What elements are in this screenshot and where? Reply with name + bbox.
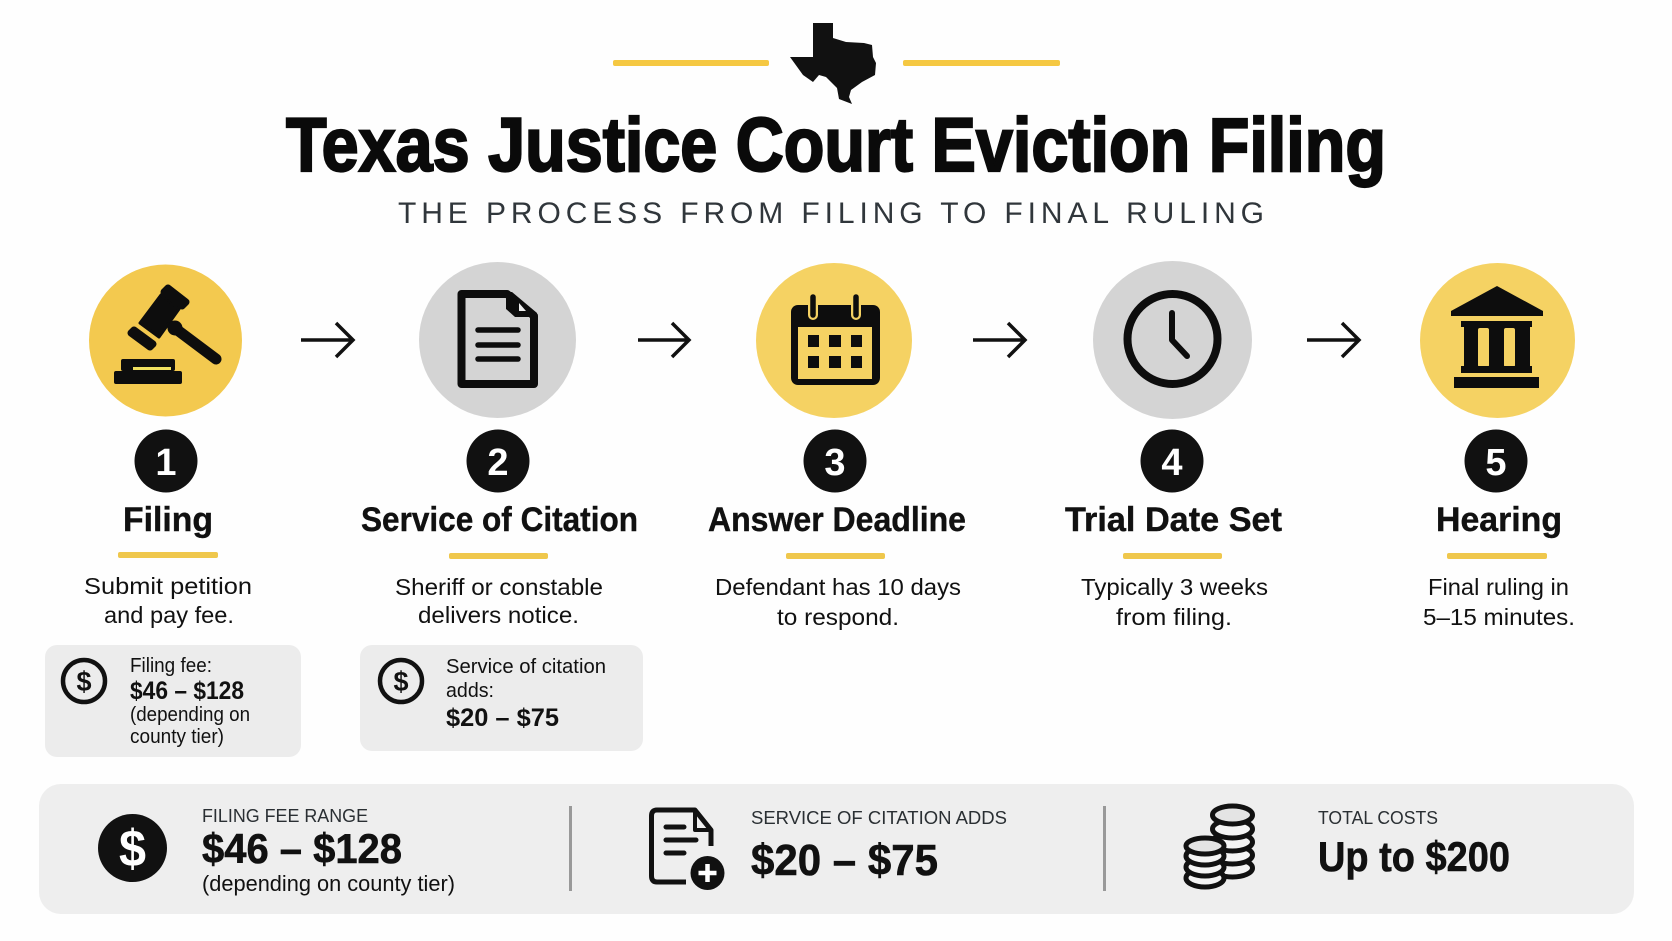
heading: Trial Date Set: Trial Date Set: [1065, 501, 1282, 539]
icon: dollar badge: [98, 814, 167, 882]
stat: filing fee range: [202, 805, 455, 896]
stat: total costs: TOTAL COSTS: [1318, 807, 1438, 828]
description: filing: Submit petition: [84, 573, 252, 599]
number badge 3: 3: [824, 442, 846, 484]
description: service: delivers notice.: [418, 602, 579, 628]
arrow 4: [1307, 323, 1359, 357]
icon: Texas silhouette: [790, 23, 876, 104]
number badge 2: [466, 430, 530, 492]
stat: filing fee range: (depending on county tier): [202, 871, 455, 896]
callout: service fee: Service of citation: [446, 656, 606, 678]
stat: total costs: Up to $200: [1318, 833, 1510, 880]
callout: filing fee: $: [76, 666, 92, 697]
description: answer: [715, 574, 961, 630]
stat: filing fee range: FILING FEE RANGE: [202, 805, 368, 826]
stat: total costs: [1318, 807, 1510, 880]
heading: Filing: Filing: [123, 501, 213, 539]
callout: service fee: $: [394, 666, 409, 697]
heading: Service of Citation: Service of Citation: [361, 501, 638, 539]
callout: filing fee: Filing fee:: [130, 655, 212, 677]
icon: courthouse in yellow circle: [1420, 263, 1575, 418]
icon: dollar badge: $: [119, 820, 146, 878]
stat: service of citation adds: [751, 807, 1007, 885]
heading: Answer Deadline: Answer Deadline: [708, 501, 966, 539]
description: service: [395, 574, 603, 628]
step 5: hearing: [1420, 263, 1575, 630]
stat: filing fee range: $46 – $128: [202, 825, 402, 872]
description: service: Sheriff or constable: [395, 574, 603, 600]
description: filing: and pay fee.: [104, 602, 234, 628]
number badge 5: 5: [1485, 442, 1507, 484]
number badge 5: [1464, 430, 1528, 492]
description: hearing: 5–15 minutes.: [1423, 604, 1575, 630]
stat: service of citation adds: SERVICE OF CITATION ADDS: [751, 807, 1007, 828]
description: filing: [84, 573, 252, 628]
step 2: service of citation: [360, 262, 643, 751]
description: trial: [1081, 574, 1268, 630]
arrow 2: [638, 323, 689, 357]
arrow 1: [301, 323, 353, 357]
number badge 3: [804, 430, 866, 492]
step 1: filing: [45, 264, 301, 757]
description: hearing: Final ruling in: [1428, 574, 1569, 600]
subtitle: THE PROCESS FROM FILING TO FINAL RULING: [398, 197, 1264, 230]
callout: filing fee: (depending on: [130, 704, 250, 726]
callout: service fee: [360, 645, 643, 751]
callout: filing fee: [45, 645, 301, 757]
heading: Hearing: Hearing: [1436, 501, 1562, 539]
description: answer: Defendant has 10 days: [715, 574, 961, 600]
step 4: trial date set: [1065, 261, 1282, 630]
icon: gavel in yellow circle: [89, 264, 242, 416]
icon: calendar in yellow circle: [756, 263, 912, 418]
description: hearing: [1423, 574, 1575, 630]
number badge 4: [1140, 430, 1204, 492]
callout: service fee: adds:: [446, 680, 494, 702]
header ornament: rules and Texas map: [613, 23, 1060, 104]
description: answer: to respond.: [777, 604, 899, 630]
description: trial: from filing.: [1116, 604, 1232, 630]
number badge 1: [134, 430, 198, 492]
icon: clock in gray circle: [1093, 261, 1252, 419]
number badge 2: 2: [487, 442, 509, 484]
callout: service fee: $20 – $75: [446, 704, 559, 732]
callout: filing fee: county tier): [130, 726, 224, 748]
callout: filing fee: $46 – $128: [130, 677, 244, 705]
step 3: answer deadline: [708, 263, 966, 630]
number badge 4: 4: [1161, 442, 1183, 484]
number badge 1: 1: [155, 442, 177, 484]
arrow 3: [973, 323, 1025, 357]
icon: document with plus: [652, 810, 724, 890]
icon: coin stacks: [1186, 806, 1252, 887]
title: Texas Justice Court Eviction Filing: [286, 103, 1386, 188]
description: trial: Typically 3 weeks: [1081, 574, 1268, 600]
stat: service of citation adds: $20 – $75: [751, 836, 938, 885]
icon: document in gray circle: [419, 262, 576, 418]
panel: cost summary: [39, 784, 1634, 914]
